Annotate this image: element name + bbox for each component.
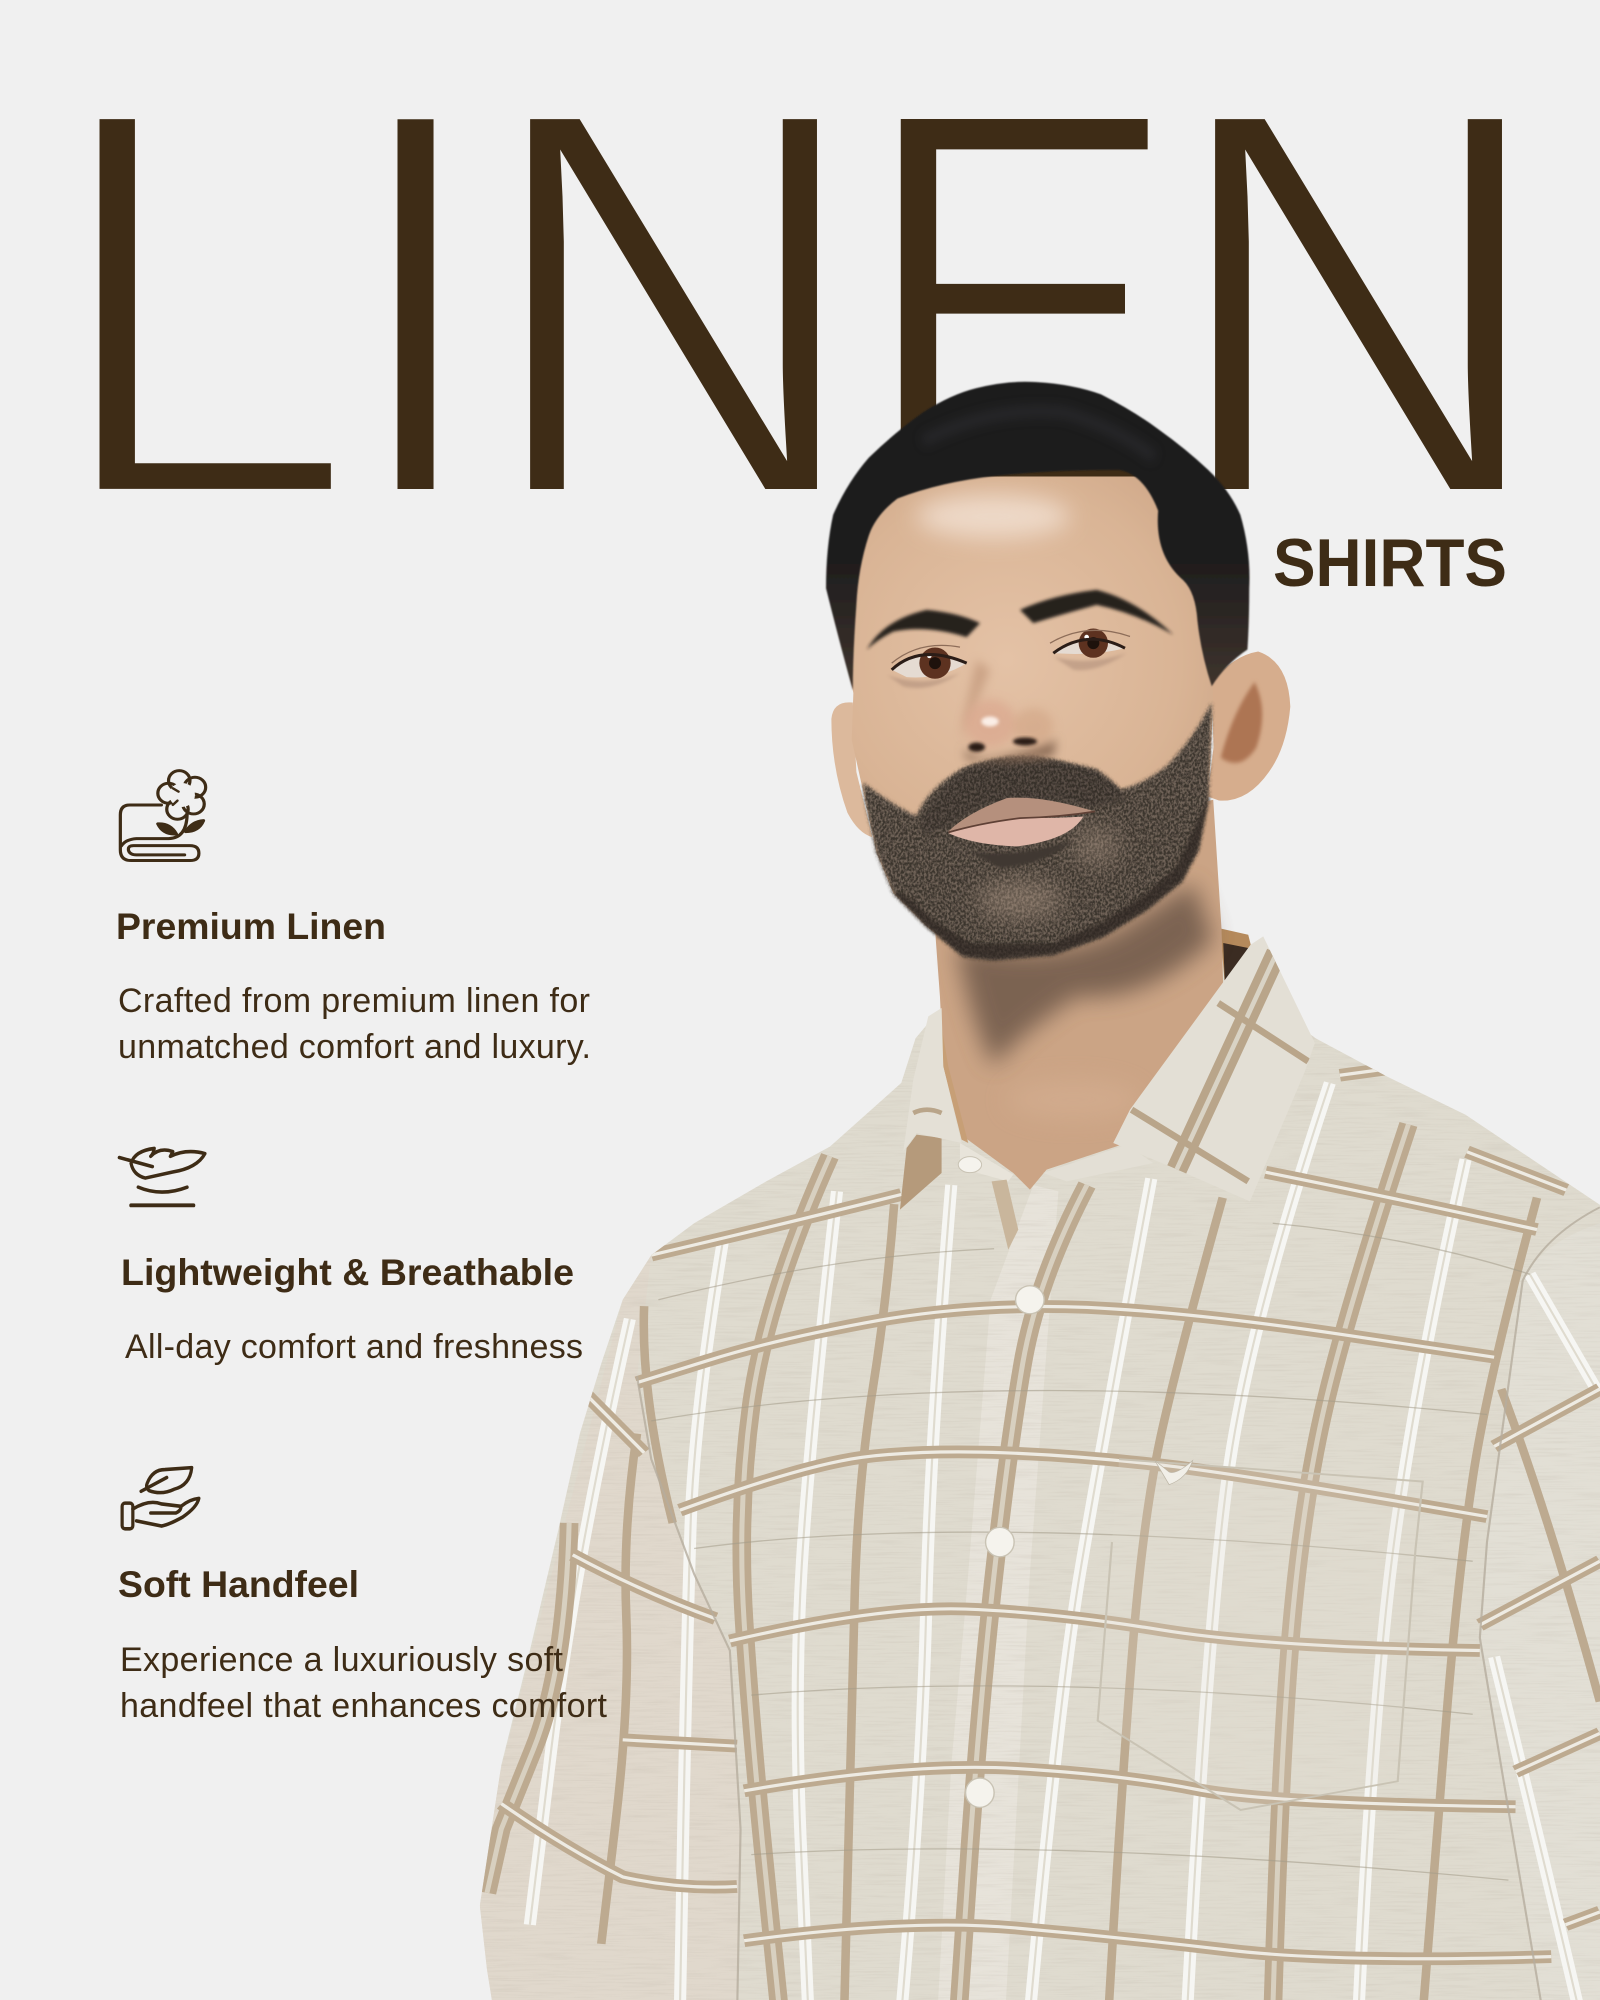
inner placket stripes — [992, 1180, 1018, 1250]
moustache — [920, 756, 1127, 835]
nose — [962, 660, 1057, 761]
icon: towel with flower — [120, 771, 206, 861]
panel: Lightweight & Breathable — [119, 1148, 583, 1366]
chin shadow — [970, 840, 1073, 868]
thin stripes — [651, 1223, 1530, 1880]
neck — [930, 800, 1223, 1190]
buttons — [966, 1286, 1044, 1807]
heading: Soft Handfeel — [118, 1564, 359, 1605]
photo: model in linen shirt — [480, 380, 1600, 2000]
panel: Premium Linen — [116, 771, 591, 1066]
logo — [1155, 1460, 1193, 1485]
pocket — [1098, 1459, 1423, 1810]
eyebrows — [867, 590, 1173, 650]
face — [840, 476, 1213, 960]
eye: right — [1050, 628, 1130, 670]
icon: hand with leaf — [122, 1468, 199, 1529]
sleeve seams — [637, 1207, 1600, 2000]
text block: All-day comfort and freshness — [125, 1328, 583, 1366]
eye: left — [887, 645, 967, 688]
panel: Soft Handfeel — [118, 1468, 608, 1725]
heading: Lightweight & Breathable — [121, 1252, 574, 1293]
left collar — [900, 1008, 1013, 1210]
right collar — [1043, 936, 1315, 1201]
hair — [826, 382, 1249, 690]
sleeve tint — [480, 1775, 500, 2000]
lips — [948, 798, 1095, 846]
collar back — [1218, 928, 1252, 985]
head — [826, 382, 1290, 960]
ears — [831, 652, 1290, 837]
text block: Experience a luxuriously soft — [120, 1641, 564, 1679]
subtitle: SHIRTS: SHIRTS — [1273, 525, 1507, 601]
text block: unmatched comfort and luxury. — [118, 1028, 591, 1066]
text block: handfeel that enhances comfort — [120, 1687, 608, 1725]
heading: Premium Linen — [116, 906, 386, 947]
neck and collar — [900, 800, 1315, 1250]
title: LINEN — [45, 0, 1551, 520]
text block: Crafted from premium linen for — [118, 982, 590, 1020]
shirt — [466, 904, 1600, 2000]
icon: feather — [119, 1148, 205, 1205]
beard — [863, 703, 1212, 960]
text block — [120, 1641, 608, 1725]
placket — [937, 1185, 1058, 2000]
forehead highlight — [917, 495, 1070, 538]
text block — [118, 982, 591, 1066]
